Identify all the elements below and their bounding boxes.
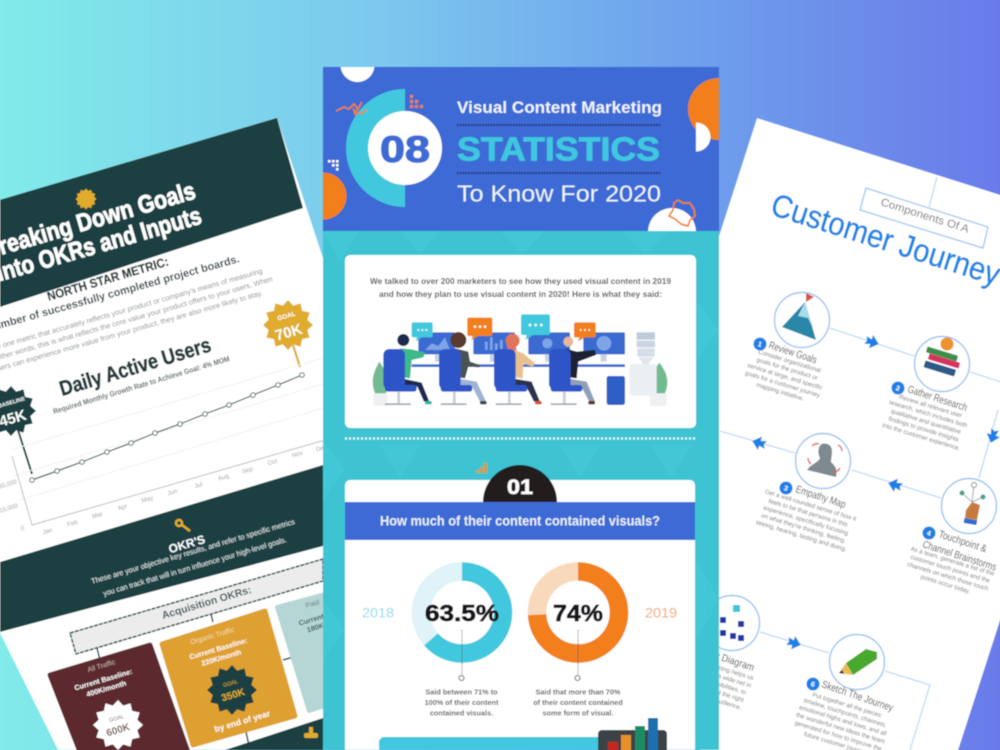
step: sketch the journey: emotional highs and lows, and all [798,704,887,738]
step: flow diagram: possibilities, to [706,678,747,696]
step: flow diagram: audience. [715,697,742,712]
question banner [345,502,695,540]
value 74%: 74% [553,600,603,626]
icon: key [176,520,190,531]
monitors and desk [412,332,625,367]
card: organic traffic [162,611,295,745]
step: empathy map: Get a well-rounded sense of how it [764,488,857,523]
line chart: 0 [20,525,26,532]
step: sketch the journey [790,634,895,750]
heading: statistics: STATISTICS [457,130,660,168]
connectors [97,614,300,750]
OKR band [0,465,323,632]
intro text: and how they plan to use visual content in 2020! Here is what they said: [379,290,662,299]
chart title: Daily Active Users [57,334,214,401]
donut 2019: 74% [537,572,619,654]
icon: orange dot grid [410,95,423,108]
step: review goals [742,292,830,407]
step: empathy map: feels to be that persona in this [768,498,849,529]
intro text [370,277,672,299]
year label 2019: 2019 [645,604,677,620]
heading divider top [457,124,661,126]
icon: inputs [304,727,318,738]
OKR description: you can track that will in turn influence your high-level goals. [102,535,288,598]
step: review goals: Consider organizational [757,349,822,374]
year label 2018: 2018 [362,604,394,620]
step: empathy map: seeing, hearing, tasting and doing. [755,519,848,553]
step: flow diagram: Journey Diagram [687,641,756,674]
card: organic traffic: 220K/month [200,647,242,668]
center header [322,66,720,232]
line chart: Apr [117,503,128,512]
card: all traffic: GOAL [109,714,125,724]
step: gather research: Gather Research [906,383,969,414]
panel: left OKR infographic [0,118,328,750]
line chart: May [141,494,155,505]
step: sketch the journey: Put together all the pieces: [811,692,884,720]
right panel page [700,118,1000,750]
goal 70K flag: 70K [273,321,304,345]
card: all traffic: 400K/month [85,678,127,699]
caption 2019: Said that more than 70% [536,688,621,696]
caption 2019: some form of visual. [543,708,613,718]
step: sketch the journey: the wonderful new ideas the team [795,712,886,745]
card: organic traffic: GOAL [223,679,239,689]
value 63.5%: 63.5% [425,600,499,626]
OKR description: These are your objective key results, and refer to specific metrics [90,517,296,586]
card: paid traffic: Paid [305,599,320,610]
card: organic traffic: by end of year [213,708,272,734]
line chart [0,358,328,536]
line chart: Jun [167,488,179,497]
inputs band [225,718,323,750]
heading: breaking down goals: Into OKRs and Inputs [0,202,205,287]
person 1 [383,334,432,405]
line chart: Feb [66,518,79,528]
question banner: How much of their content contained visuals? [380,514,660,528]
acquisition OKR box [70,559,323,654]
caption 2018 [425,688,499,718]
step: empathy map [755,434,857,554]
line chart: Mar [91,511,104,520]
number 08 badge [346,89,442,207]
step: empathy map: experience, specifically focusing [762,505,850,537]
icon: orange pulse line [336,102,367,114]
caption 2019: of their content contained [533,698,623,707]
card: organic traffic: Current Baseline: [188,636,248,661]
line chart: Dec [315,444,328,454]
step: touchpoint and channel brainstorms: points occur today. [920,574,971,595]
person 3 [494,334,542,405]
card: all traffic: Current Baseline: [73,667,133,692]
caption 2019 [533,688,623,718]
plants and cooler [373,332,667,406]
illustration: team at desks [373,314,667,406]
line chart: Jul [194,481,203,490]
intro text: We talked to over 200 marketers to see how they used visual content in 2019 [370,277,672,286]
center panel teal background [323,231,719,750]
step: review goals: goals for the product or [756,357,819,382]
step: empathy map: on what they're thinking, feeling, [760,512,847,545]
card: organic traffic: 350K [220,687,247,704]
icon: orange gear outline [669,200,695,226]
step: gather research: qualitative and quantitative [890,408,962,436]
statistic card 01 [345,463,695,750]
step: touchpoint and channel brainstorms: Touchpoint & [937,528,988,555]
line chart: Nov [291,449,305,460]
step: review goals: Review Goals [767,339,818,366]
step: gather research: findings to provide insights [888,416,959,444]
step: touchpoint and channel brainstorms: 4 [926,530,932,538]
flow arrows [750,333,1000,652]
panel: right customer journey infographic [683,118,1000,750]
blue case [607,376,625,405]
caption 2018: Said between 71% to [425,688,498,696]
step: gather research: Review all relevant user [898,394,963,420]
card: organic traffic: Organic Traffic [190,627,236,646]
line chart: Aug [217,472,230,483]
step: review goals: mapping initiative. [755,382,805,403]
heading divider bottom [457,172,661,174]
panel: center visual content marketing infographic [322,66,720,750]
step: review goals: service at large, and specific [746,362,823,392]
card: paid traffic: 180K [306,621,326,634]
donut 2018: 63.5% [421,572,503,654]
icon: gold badge [76,188,96,210]
person 4 [549,337,596,405]
step: sketch the journey: 6 [810,681,816,689]
icon: small orange bars [476,463,487,473]
left panel page [0,118,323,750]
left panel header band [0,118,303,307]
heading: visual content marketing: Visual Content Marketing [457,99,662,117]
step: touchpoint and channel brainstorms [903,478,998,601]
number 08 badge: 08 [380,129,430,170]
step: gather research [881,336,971,453]
north star metric heading: NORTH STAR METRIC: [45,255,170,304]
step: gather research: into the customer experience. [881,422,961,452]
number 01 tab [483,465,557,502]
step: empathy map: 3 [783,485,789,493]
goal 70K flag: GOAL [277,311,297,323]
step: flow diagram [683,596,760,713]
step: review goals: 1 [757,341,763,349]
heading: to know for 2020: To Know For 2020 [457,180,661,206]
leader lines [459,630,580,680]
dotted divider [345,437,695,440]
card: paid traffic: Current [298,611,326,628]
line chart: Oct [267,458,278,467]
acquisition OKR box: Acquisition OKRs: [160,584,253,622]
line chart: Jan [42,527,54,536]
step: touchpoint and channel brainstorms: customer touch points and the [909,554,991,585]
card: paid traffic [277,594,326,711]
baseline 45K flag [0,386,36,474]
card: all traffic [50,645,188,750]
icon: white dot grid [328,160,338,170]
step: gather research: research, which includes both [888,399,969,430]
OKR heading: OKR'S [167,532,207,556]
step: empathy map: Empathy Map [794,483,847,511]
step: flow diagram: Brainstorming helps us [692,657,754,682]
components box [860,188,988,248]
chart subtitle: Required Monthly Growth Rate to Achieve Goal: 4% MOM [52,354,231,416]
cyan callout box [379,737,650,750]
step: flow diagram: cast a wide net in [704,669,753,690]
step: flow diagram: find the right [710,687,745,704]
step: sketch the journey: timeline, touchpoints, channels, [803,697,888,729]
step: review goals: goals for a customer journey [744,370,822,400]
step: touchpoint and channel brainstorms: channels on which those touch [906,561,990,593]
step: sketch the journey: Sketch The Journey [820,678,895,714]
goal 70K flag [263,300,313,367]
connecting lines [720,177,1000,750]
icon: bar chart tablet [598,718,667,750]
step: gather research: 2 [895,385,901,393]
person 2 [439,332,487,405]
header decorative circles [322,66,720,232]
step: touchpoint and channel brainstorms: As a team, generate a list of the [910,545,996,578]
card: all traffic: 600K [105,722,132,739]
speech bubbles [412,314,596,341]
number 01 tab: 01 [507,476,533,499]
caption 2018: contained visuals. [430,708,493,718]
card: all traffic: All Traffic [87,659,117,674]
line chart: Sep [241,465,254,476]
caption 2018: 100% of their content [425,698,499,707]
intro card [345,255,696,428]
components box: Components Of A [879,196,971,236]
